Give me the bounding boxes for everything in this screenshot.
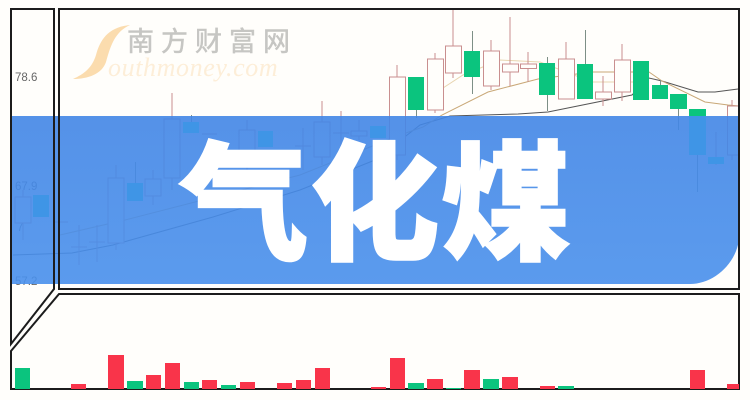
- left axis frame: [11, 9, 54, 344]
- axis labels: [15, 72, 37, 288]
- watermark logo: [73, 25, 297, 82]
- axis value 78.6: 78.6: [15, 72, 37, 84]
- axis value 57.2: 57.2: [15, 276, 37, 288]
- axis value 67.9: 67.9: [15, 181, 37, 193]
- falling candles: [135, 30, 706, 192]
- light orange moving average: [443, 60, 649, 88]
- volume chart frame: [11, 294, 739, 389]
- watermark chinese name: 南方财富网: [127, 27, 297, 57]
- icon: watermark S swoosh: [73, 25, 130, 79]
- blue title band: [10, 116, 739, 284]
- main chart frame: [59, 9, 739, 289]
- title: 气化煤: [180, 134, 573, 277]
- falling volume bars: [15, 368, 574, 389]
- orange moving average: [60, 72, 739, 235]
- rising volume bars: [71, 355, 739, 389]
- axis value 7: 7: [17, 222, 23, 234]
- falling candles seen through the band: [33, 116, 724, 217]
- volume bars: [15, 355, 739, 389]
- moving average lines: [13, 60, 739, 255]
- watermark domain: outhmoney.com: [108, 53, 278, 82]
- dark moving average: [13, 78, 738, 255]
- candlestick chart: [15, 9, 744, 265]
- rising candles: [15, 9, 744, 265]
